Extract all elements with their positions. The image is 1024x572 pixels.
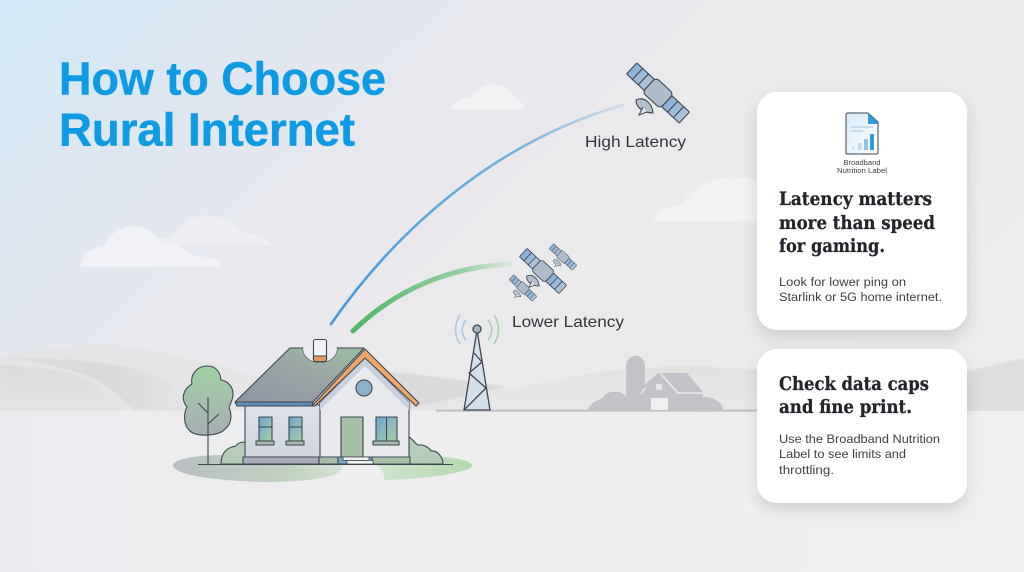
icon: lower latency satellites (508, 243, 578, 302)
title (59, 52, 386, 156)
card heading: more than speed (779, 213, 935, 234)
card body (779, 275, 942, 304)
label: high latency: High Latency (585, 134, 686, 151)
card body: Use the Broadband Nutrition (779, 432, 940, 446)
ground line (198, 464, 453, 466)
base and steps (243, 457, 319, 464)
card body: Label to see limits and (779, 447, 906, 461)
barn silhouette and farm line (436, 356, 758, 412)
shrubs (221, 442, 246, 464)
door (341, 417, 363, 457)
card body (779, 432, 940, 477)
house illustration (173, 340, 472, 482)
card heading: Latency matters (779, 189, 932, 210)
roof (235, 348, 364, 402)
card heading: and fine print. (779, 397, 912, 418)
card body: Starlink or 5G home internet. (779, 290, 942, 304)
icon: cell tower (456, 315, 498, 410)
gable trim (312, 349, 419, 406)
arc: high latency signal (331, 105, 623, 324)
icon: phone on roof (303, 340, 337, 362)
icon caption (837, 160, 887, 175)
windows (259, 417, 272, 441)
icon: high latency satellite (625, 61, 691, 125)
label: lower latency: Lower Latency (512, 314, 624, 331)
card heading: Check data caps (779, 374, 929, 395)
rolling hills (0, 345, 1024, 411)
card heading (779, 374, 929, 418)
tree (183, 366, 233, 464)
card heading: for gaming. (779, 236, 885, 257)
arc: lower latency signal (353, 264, 513, 331)
lawn (173, 455, 472, 482)
card: data caps (757, 349, 967, 503)
title: Rural Internet (59, 104, 355, 156)
card body: Look for lower ping on (779, 275, 906, 289)
icon caption: Broadband (844, 160, 881, 167)
icon caption: Nutrition Label (837, 168, 887, 175)
card: latency (757, 92, 967, 330)
card heading (779, 189, 935, 257)
icon: broadband nutrition label document (846, 113, 878, 154)
walls (245, 405, 321, 458)
ground (0, 411, 1024, 572)
card body: throttling. (779, 463, 834, 477)
clouds (81, 85, 770, 267)
title: How to Choose (59, 52, 386, 104)
